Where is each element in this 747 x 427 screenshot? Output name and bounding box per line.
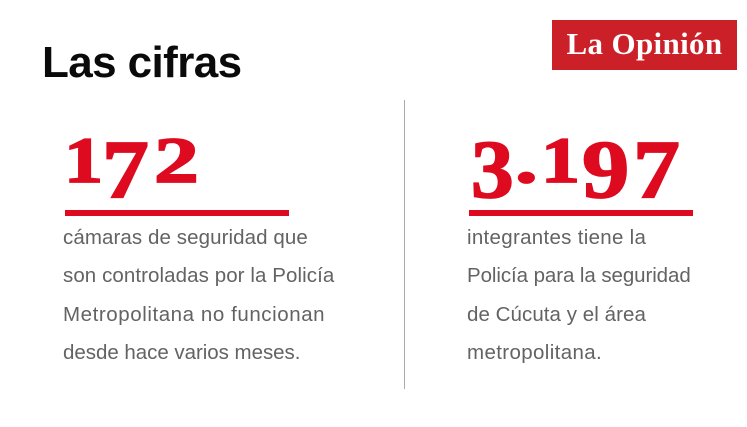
- title: Las cifras: [42, 38, 241, 87]
- panel: right figure: [467, 123, 693, 364]
- logo: La Opinión: [552, 20, 737, 70]
- description right: integrantes tiene la: [467, 226, 646, 249]
- vertical divider: [404, 100, 405, 389]
- number 172: [64, 123, 199, 215]
- number 3.197: 7: [632, 123, 679, 215]
- description right: Policía para la seguridad: [467, 264, 691, 287]
- number 3.197: 9: [582, 123, 629, 215]
- number 3.197: .: [515, 124, 538, 196]
- red underline left: [65, 210, 289, 216]
- number 172: 1: [64, 124, 103, 196]
- logo: La Opinión: La Opinión: [566, 26, 722, 60]
- number 3.197: [470, 123, 679, 215]
- description right: metropolitana.: [467, 341, 602, 364]
- description left: Metropolitana no funcionan: [63, 303, 325, 326]
- description left: son controladas por la Policía: [63, 264, 334, 287]
- panel: left figure: [63, 123, 334, 364]
- description right: de Cúcuta y el área: [467, 303, 646, 326]
- number 172: 7: [102, 123, 148, 215]
- description left: cámaras de seguridad que: [63, 226, 308, 249]
- description left: desde hace varios meses.: [63, 341, 300, 364]
- description right: [467, 226, 691, 364]
- red underline right: [469, 210, 693, 216]
- number 3.197: 3: [470, 123, 513, 215]
- number 3.197: 1: [541, 124, 580, 196]
- number 172: 2: [154, 124, 199, 196]
- description left: [63, 226, 334, 364]
